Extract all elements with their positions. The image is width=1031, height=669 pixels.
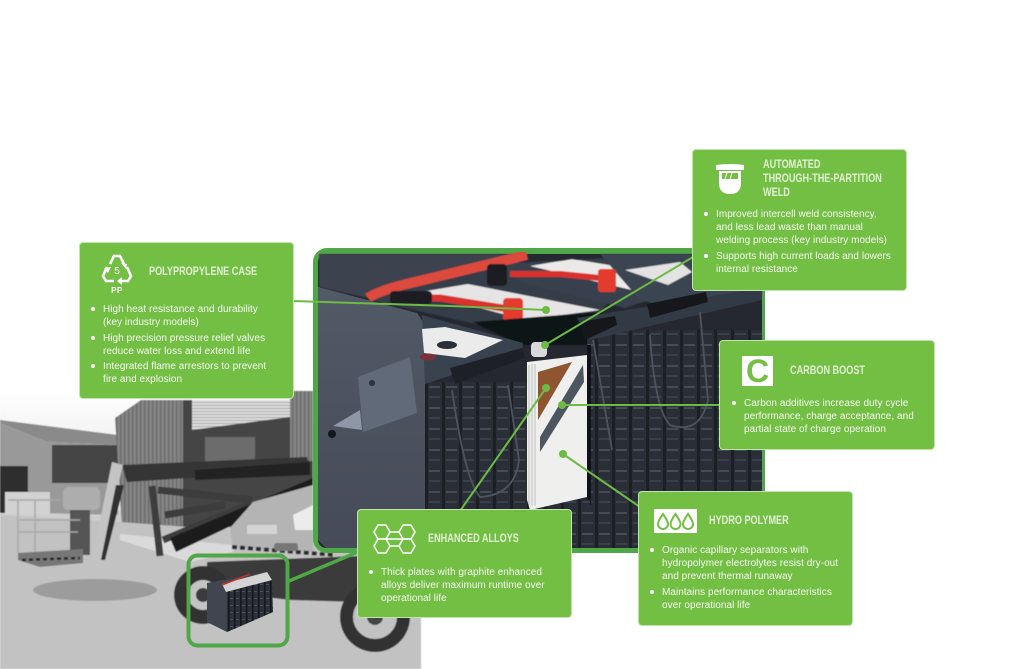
bullet list — [744, 397, 914, 436]
icon: carbon C — [742, 356, 773, 386]
bullet list: and less lead waste than manual — [716, 222, 863, 233]
bullet list: High precision pressure relief valves — [103, 333, 265, 344]
panel: hydro polymer — [639, 492, 852, 625]
bullet list: alloys deliver maximum runtime over — [381, 580, 545, 591]
bullet list: operational life — [381, 593, 447, 604]
battery tops and red cables — [319, 254, 762, 345]
mounting bracket — [328, 357, 417, 438]
bullet list: Maintains performance characteristics — [662, 587, 832, 598]
bullet list: performance, charge acceptance, and — [744, 411, 914, 422]
bullet list: Integrated flame arrestors to prevent — [103, 361, 266, 372]
bullet list: Improved intercell weld consistency, — [716, 209, 877, 220]
left battery case — [420, 315, 527, 548]
bullet list: partial state of charge operation — [744, 424, 886, 435]
bullet list: Supports high current loads and lowers — [716, 251, 891, 262]
right battery cases — [577, 288, 762, 548]
panel: carbon boost — [720, 341, 934, 449]
bullet list — [704, 209, 891, 275]
bullet list: High heat resistance and durability — [103, 304, 258, 315]
bullet list: Carbon additives increase duty cycle — [744, 398, 908, 409]
bullet list: fire and explosion — [103, 374, 182, 385]
bullet list: (key industry models) — [103, 317, 199, 328]
heading: WELD — [763, 185, 790, 199]
heading: POLYPROPYLENE CASE — [149, 264, 257, 278]
cell cutaway with plates — [527, 342, 590, 548]
bullet list: reduce water loss and extend life — [103, 346, 251, 357]
icon: recycling 5 PP: 5 — [114, 266, 120, 277]
icon: welding mask — [716, 164, 744, 194]
lower boom truss — [152, 486, 252, 556]
bullet list: welding process (key industry models) — [716, 235, 887, 246]
heading: HYDRO POLYMER — [709, 513, 789, 527]
photo: aerial lift in yard — [0, 391, 421, 669]
icon: carbon C: C — [746, 353, 769, 389]
callout leader lines — [293, 257, 720, 511]
heading — [763, 157, 882, 199]
bullet list: over operational life — [662, 600, 750, 611]
panel: automated through-the-partition weld — [693, 150, 906, 290]
heading: ENHANCED ALLOYS — [428, 531, 519, 545]
bullet list — [91, 304, 266, 385]
left mounting plate — [318, 287, 425, 548]
icon: recycling 5 PP — [102, 254, 132, 295]
bullet list — [381, 566, 545, 605]
heading: THROUGH-THE-PARTITION — [763, 171, 882, 185]
bullet list: Thick plates with graphite enhanced — [381, 567, 542, 578]
heading: AUTOMATED — [763, 157, 820, 171]
icon: water drops — [654, 509, 697, 533]
bullet list: and prevent thermal runaway — [662, 571, 793, 582]
panel: polypropylene case — [80, 243, 293, 398]
icon: hexagons — [373, 524, 416, 554]
inset: small battery highlight — [188, 551, 360, 646]
battery cutaway panel — [313, 248, 765, 553]
bullet list: hydropolymer electrolytes resist dry-out — [662, 558, 838, 569]
bullet list — [650, 545, 838, 611]
bullet list: Organic capillary separators with — [662, 545, 808, 556]
icon: recycling 5 PP: PP — [111, 286, 123, 295]
panel: enhanced alloys — [358, 510, 571, 617]
bullet list: internal resistance — [716, 264, 798, 275]
heading: CARBON BOOST — [790, 363, 865, 377]
